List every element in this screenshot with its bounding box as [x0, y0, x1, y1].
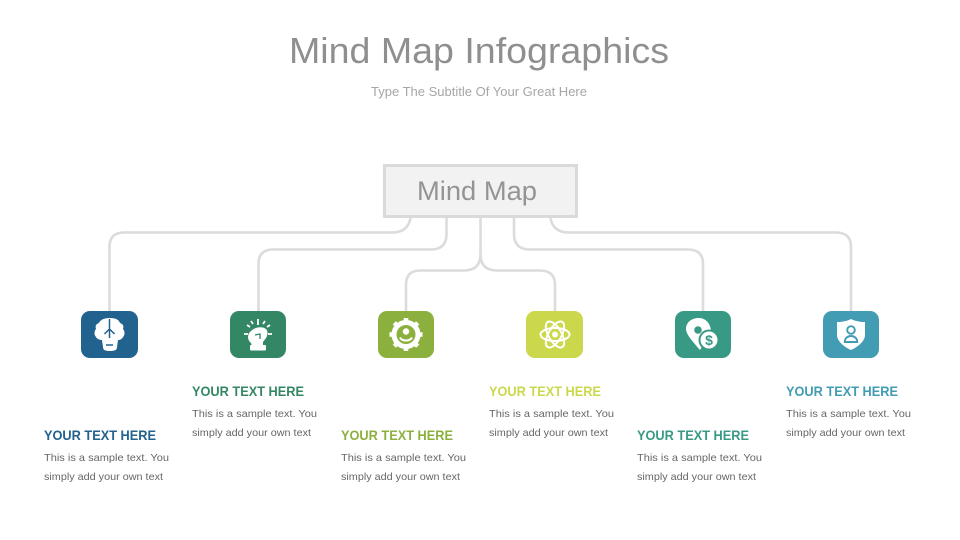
icon: location pin with dollar — [675, 311, 731, 358]
icon: brain bulb — [81, 311, 138, 358]
text block 6: This is a sample text. You — [786, 408, 911, 420]
icon: gear with person — [378, 311, 434, 358]
title: Mind Map Infographics — [289, 30, 669, 71]
text block 6 — [786, 383, 911, 439]
text block 4 — [489, 383, 614, 439]
text block 4: simply add your own text — [489, 427, 608, 439]
text block 2: This is a sample text. You — [192, 408, 317, 420]
text block 2 — [192, 383, 317, 439]
text block 1: This is a sample text. You — [44, 452, 169, 464]
text block 4: This is a sample text. You — [489, 408, 614, 420]
text block 3: simply add your own text — [341, 471, 460, 483]
text block 4: YOUR TEXT HERE — [489, 383, 601, 399]
central box: Mind Map: Mind Map — [417, 176, 537, 206]
text block 2: simply add your own text — [192, 427, 311, 439]
connectors — [110, 218, 851, 311]
text block 3 — [341, 427, 466, 483]
text block 3: This is a sample text. You — [341, 452, 466, 464]
icon: atom — [526, 311, 583, 358]
text block 6: simply add your own text — [786, 427, 905, 439]
icon: location pin with dollar: $ — [705, 332, 713, 348]
text block 5: This is a sample text. You — [637, 452, 762, 464]
icon: hand with light — [230, 311, 286, 358]
text block 5: YOUR TEXT HERE — [637, 427, 749, 443]
text block 1: YOUR TEXT HERE — [44, 427, 156, 443]
text block 5 — [637, 427, 762, 483]
subtitle: Type The Subtitle Of Your Great Here — [371, 85, 587, 99]
central box: Mind Map — [384, 166, 576, 216]
icon: shield with person — [823, 311, 879, 358]
text block 2: YOUR TEXT HERE — [192, 383, 304, 399]
text block 5: simply add your own text — [637, 471, 756, 483]
text block 1: simply add your own text — [44, 471, 163, 483]
text block 3: YOUR TEXT HERE — [341, 427, 453, 443]
text block 6: YOUR TEXT HERE — [786, 383, 898, 399]
text block 1 — [44, 427, 169, 483]
